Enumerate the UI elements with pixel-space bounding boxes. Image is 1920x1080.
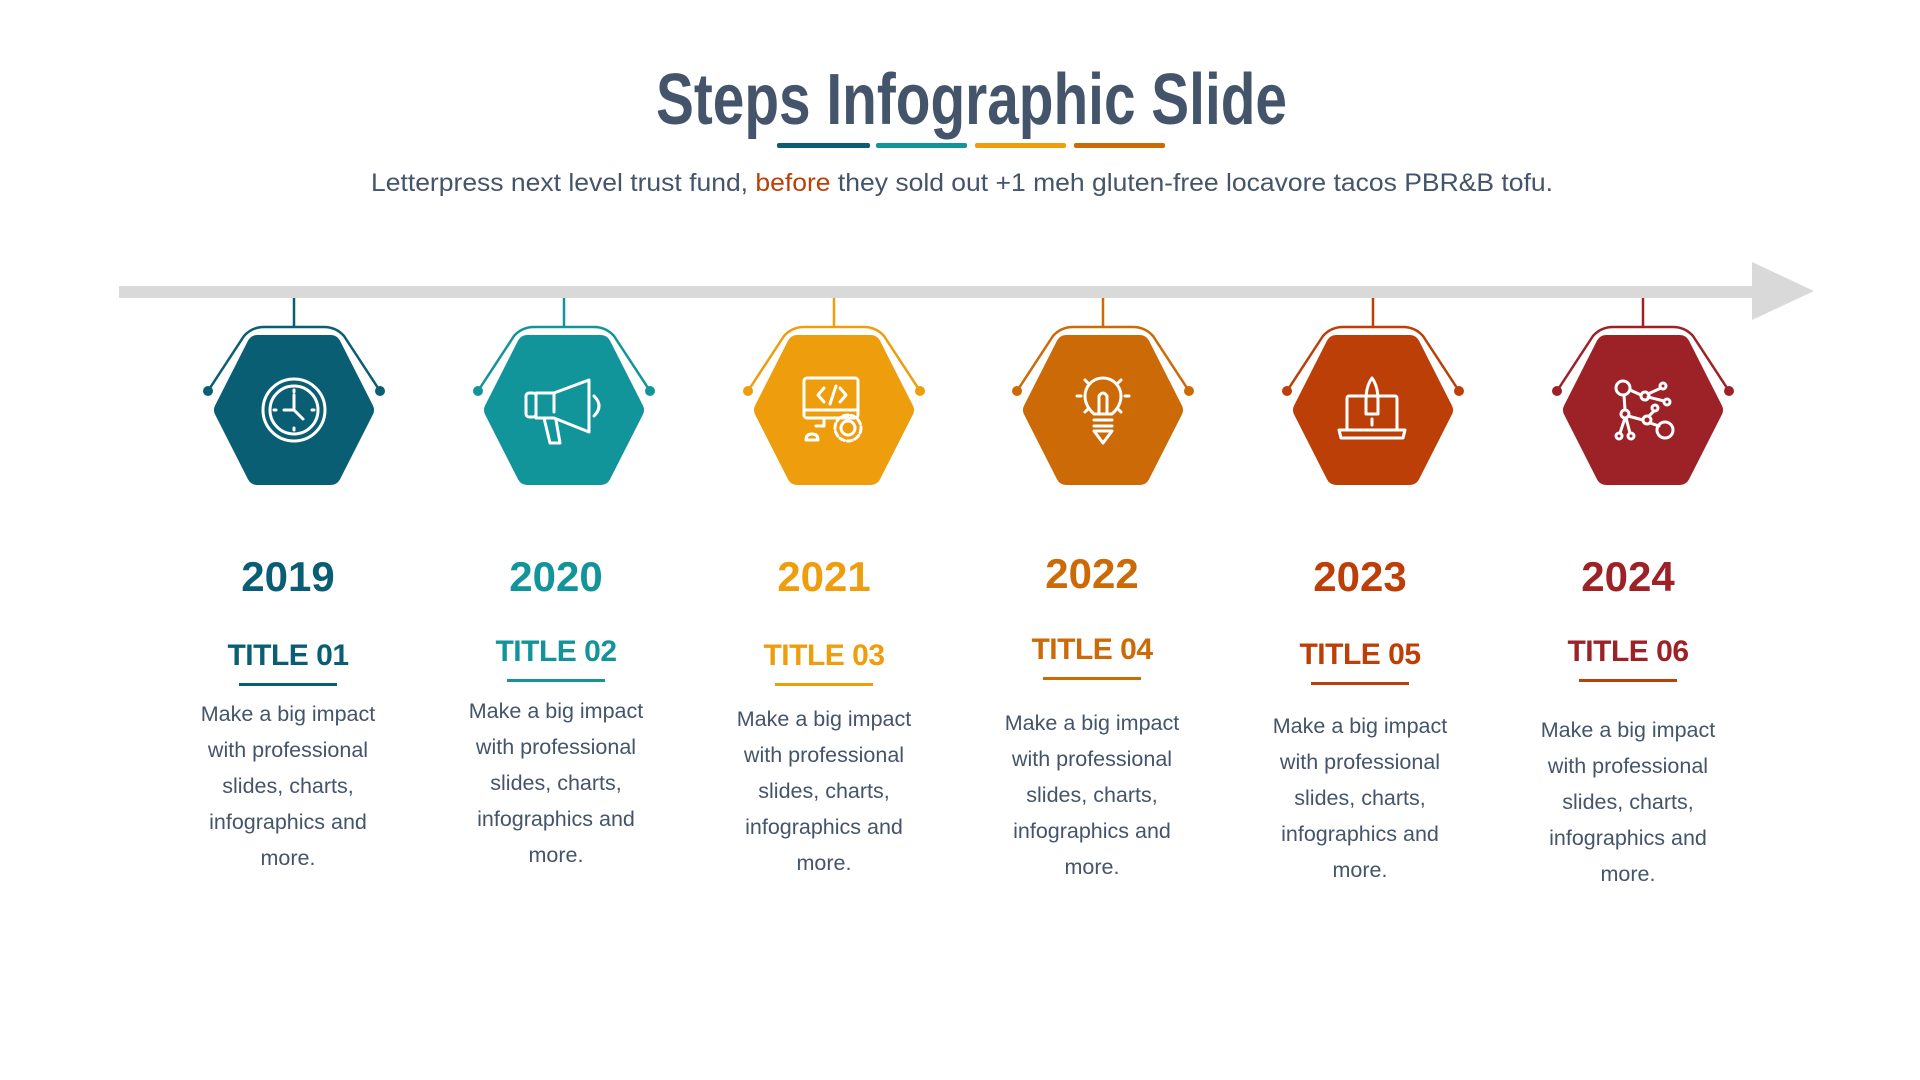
- body text 4: more.: [1065, 855, 1119, 879]
- body text 4: [1005, 711, 1180, 879]
- title 02: TITLE 02: [495, 635, 617, 668]
- body text 1: Make a big impact: [201, 702, 375, 726]
- column 3: [737, 553, 912, 875]
- column 6: [1541, 553, 1716, 886]
- header: [371, 60, 1553, 197]
- body text 1: infographics and: [209, 810, 367, 834]
- body text 2: Make a big impact: [469, 699, 643, 723]
- body text 5: Make a big impact: [1273, 714, 1447, 738]
- title 06: TITLE 06: [1567, 635, 1689, 668]
- body text 5: [1273, 714, 1448, 882]
- body text 1: [201, 702, 376, 870]
- step 5 hexagon: [1282, 298, 1464, 475]
- icon: network: [1616, 381, 1673, 439]
- body text 1: with professional: [208, 738, 368, 762]
- body text 2: infographics and: [477, 807, 635, 831]
- title 03: TITLE 03: [763, 639, 885, 672]
- body text 6: slides, charts,: [1562, 790, 1694, 814]
- column 5: [1273, 553, 1448, 882]
- timeline graphic: [119, 262, 1814, 485]
- body text 3: with professional: [744, 743, 904, 767]
- body text 1: slides, charts,: [222, 774, 354, 798]
- step 2 hexagon: [473, 298, 655, 475]
- body text 3: Make a big impact: [737, 707, 911, 731]
- body text 3: [737, 707, 912, 875]
- body text 2: with professional: [476, 735, 636, 759]
- body text 5: infographics and: [1281, 822, 1439, 846]
- body text 2: more.: [529, 843, 583, 867]
- body text 5: more.: [1333, 858, 1387, 882]
- icon: clock: [263, 379, 325, 441]
- year 2022: 2022: [1045, 550, 1139, 597]
- body text 4: infographics and: [1013, 819, 1171, 843]
- body text 5: with professional: [1280, 750, 1440, 774]
- column 1: [201, 553, 376, 870]
- year 2024: 2024: [1581, 553, 1675, 600]
- year 2020: 2020: [509, 553, 603, 600]
- body text 2: slides, charts,: [490, 771, 622, 795]
- title 05: TITLE 05: [1299, 638, 1421, 671]
- body text 4: slides, charts,: [1026, 783, 1158, 807]
- step 6 hexagon: [1552, 298, 1734, 475]
- year 2019: 2019: [241, 553, 335, 600]
- subtitle: Letterpress next level trust fund, before they sold out +1 meh gluten-free locavore tacos PBR&B tofu.: [371, 169, 1553, 197]
- title 04: TITLE 04: [1031, 633, 1153, 666]
- body text 3: more.: [797, 851, 851, 875]
- body text 6: with professional: [1548, 754, 1708, 778]
- step 1 hexagon: [203, 298, 385, 475]
- body text 2: [469, 699, 644, 867]
- body text 4: Make a big impact: [1005, 711, 1179, 735]
- step 4 hexagon: [1012, 298, 1194, 475]
- icon: laptop rocket: [1339, 378, 1405, 438]
- icon: megaphone: [526, 380, 599, 443]
- body text 6: more.: [1601, 862, 1655, 886]
- body text 6: [1541, 718, 1716, 886]
- title underline: [777, 143, 1165, 148]
- arrow: [119, 262, 1814, 320]
- step 3 hexagon: [743, 298, 925, 475]
- title 01: TITLE 01: [227, 639, 349, 672]
- icon: monitor code: [804, 378, 861, 441]
- body text 6: infographics and: [1549, 826, 1707, 850]
- year 2021: 2021: [777, 553, 871, 600]
- body text 6: Make a big impact: [1541, 718, 1715, 742]
- body text 4: with professional: [1012, 747, 1172, 771]
- column 2: [469, 553, 644, 867]
- column 4: [1005, 550, 1180, 879]
- icon: light bulb: [1077, 378, 1129, 443]
- body text 3: infographics and: [745, 815, 903, 839]
- body text 5: slides, charts,: [1294, 786, 1426, 810]
- title: Steps Infographic Slide: [656, 60, 1287, 140]
- body text 3: slides, charts,: [758, 779, 890, 803]
- year 2023: 2023: [1313, 553, 1407, 600]
- body text 1: more.: [261, 846, 315, 870]
